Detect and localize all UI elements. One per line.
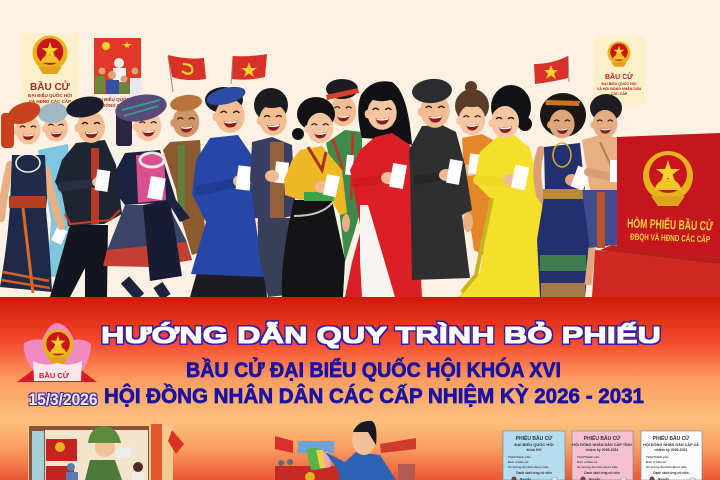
ballot: national assembly bbox=[503, 431, 565, 480]
person: woman in yellow ao dai bbox=[458, 85, 550, 297]
ballot box on table bbox=[592, 133, 720, 297]
flag: gold star right bbox=[534, 56, 569, 84]
election logo with lotus bbox=[17, 323, 97, 382]
poster: election left: VÀ HĐND CÁC CẤP bbox=[29, 98, 71, 104]
person: man in long blue robe bbox=[190, 83, 267, 297]
person: woman in yellow blouse and black skirt bbox=[282, 97, 350, 297]
ballot: commune council: Số lượng đại biểu được bầu bbox=[646, 465, 687, 469]
person: woman in indigo highland dress bbox=[537, 93, 598, 297]
ballot: national assembly: Tỉnh/Thành phố bbox=[508, 455, 531, 459]
person: man in brown brocade bbox=[163, 93, 206, 255]
lower banner background bbox=[0, 297, 720, 480]
ballot: commune council: nhiệm kỳ 2026-2031 bbox=[655, 448, 687, 452]
poster: election left: ĐẠI BIỂU QUỐC HỘI bbox=[28, 91, 72, 98]
poster: election right bbox=[594, 36, 645, 105]
person: man in black robe bbox=[409, 77, 473, 280]
poster: party and people: HỘI ĐỒNG NHÂN DÂN bbox=[93, 101, 141, 108]
flag: hammer and sickle bbox=[168, 55, 206, 92]
date: 15/3/2026 bbox=[28, 390, 98, 409]
person: woman with red turban bbox=[0, 98, 61, 293]
poster: election right: VÀ HỘI ĐỒNG NHÂN DÂN bbox=[597, 86, 642, 91]
subtitle line 2: HỘI ĐỒNG NHÂN DÂN CÁC CẤP NHIỆM KỲ 2026 - 2031 bbox=[104, 384, 644, 408]
ballot: commune council: Tỉnh/Thành phố bbox=[646, 455, 669, 459]
flag: gold star left bbox=[231, 54, 267, 84]
poster: election left bbox=[21, 33, 79, 108]
box front bbox=[617, 133, 720, 258]
person: Hmong woman bbox=[103, 91, 192, 297]
illustration: soldier at polling station bbox=[28, 424, 184, 480]
ballot: provincial council: Đơn vị bầu cử bbox=[577, 460, 598, 464]
icon: national emblem bbox=[643, 151, 693, 206]
person: man in black jacket bbox=[50, 93, 122, 297]
flag on wall bbox=[168, 430, 184, 454]
ballot: national assembly: Danh sách ứng cử viên bbox=[516, 471, 552, 475]
poster: election right: ĐẠI BIỂU QUỐC HỘI bbox=[602, 81, 636, 86]
ballot: commune council: Danh sách ứng cử viên bbox=[653, 471, 689, 475]
election logo with lotus: BẦU CỬ bbox=[39, 370, 70, 380]
ballot: provincial council bbox=[572, 431, 633, 480]
poster: party and people: ĐẠI BIỂU QUỐC HỘI bbox=[95, 95, 139, 102]
ballot: national assembly: Số lượng đại biểu được bầu bbox=[508, 465, 549, 469]
ballot: provincial council: PHIẾU BẦU CỬ bbox=[584, 435, 621, 442]
ballot: commune council: Đơn vị bầu cử bbox=[646, 460, 667, 464]
ballot: national assembly: Đơn vị bầu cử bbox=[508, 460, 529, 464]
ballot: commune council bbox=[641, 431, 702, 480]
table bbox=[592, 250, 720, 297]
person: man in green bbox=[326, 79, 362, 262]
crowd of voters in ethnic costumes bbox=[0, 77, 622, 297]
ballot: national assembly: khóa XVI bbox=[527, 448, 541, 452]
soldier bbox=[85, 426, 132, 480]
person: woman in red ao dai bbox=[345, 81, 428, 297]
ballot: commune council: HỘI ĐỒNG NHÂN DÂN CẤP XÃ bbox=[643, 442, 699, 447]
poster: election right: CÁC CẤP bbox=[611, 91, 628, 96]
ballot: national assembly: PHIẾU BẦU CỬ bbox=[516, 435, 553, 442]
subtitle line 1: BẦU CỬ ĐẠI BIỂU QUỐC HỘI KHÓA XVI bbox=[186, 358, 561, 382]
person: shirtless man in woven skirt bbox=[582, 94, 622, 285]
illustration: young voter casting ballot bbox=[275, 421, 416, 480]
ballot: national assembly: ĐẠI BIỂU QUỐC HỘI bbox=[515, 442, 553, 447]
ballot: commune council: PHIẾU BẦU CỬ bbox=[653, 435, 690, 442]
ballot: provincial council: Danh sách ứng cử viên bbox=[584, 471, 620, 475]
person: woman in light blue bbox=[37, 101, 75, 278]
ballot: provincial council: nhiệm kỳ 2026-2031 bbox=[586, 448, 618, 452]
poster: election left: BẦU CỬ bbox=[30, 80, 71, 93]
title: HƯỚNG DẪN QUY TRÌNH BỎ PHIẾU bbox=[101, 320, 661, 348]
ballot: provincial council: Tỉnh/Thành phố bbox=[577, 455, 600, 459]
person: woman in orange bbox=[455, 81, 493, 255]
ballot: provincial council: HỘI ĐỒNG NHÂN DÂN CẤP TỈNH bbox=[572, 442, 632, 447]
poster: party and people bbox=[92, 36, 142, 111]
poster: election right: BẦU CỬ bbox=[605, 71, 633, 81]
ballot: provincial council: Số lượng đại biểu được bầu bbox=[577, 465, 618, 469]
person: man in navy jacket bbox=[250, 88, 296, 297]
